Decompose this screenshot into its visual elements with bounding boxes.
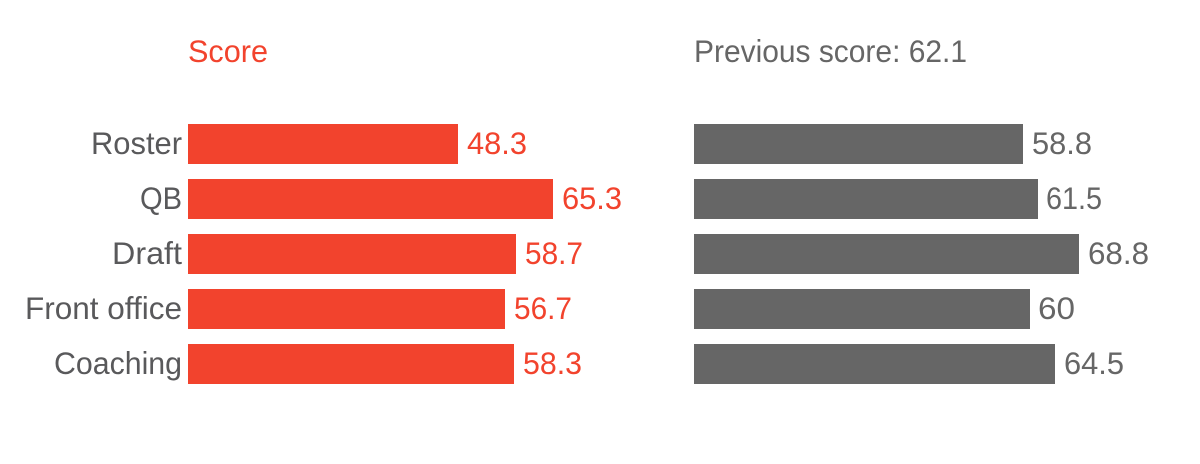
score values: 65.3 bbox=[562, 180, 622, 216]
previous score values: 68.8 bbox=[1088, 235, 1149, 271]
row labels: Roster bbox=[91, 125, 182, 161]
score values: 58.3 bbox=[523, 345, 582, 381]
previous score values: 58.8 bbox=[1032, 125, 1092, 161]
row labels: Front office bbox=[25, 290, 182, 326]
previous score values bbox=[1032, 125, 1149, 381]
row labels: Coaching bbox=[54, 345, 182, 381]
score values: 56.7 bbox=[514, 290, 572, 326]
grey previous score bars bbox=[694, 124, 1079, 384]
score values: 58.7 bbox=[525, 235, 583, 271]
row labels: QB bbox=[140, 180, 182, 216]
heading: Score: Score bbox=[188, 33, 268, 69]
heading: Previous score: Previous score: 62.1 bbox=[694, 33, 967, 69]
previous score values: 61.5 bbox=[1046, 180, 1102, 216]
score values: 48.3 bbox=[467, 125, 527, 161]
score values bbox=[467, 125, 622, 381]
previous score values: 60 bbox=[1038, 290, 1075, 326]
previous score values: 64.5 bbox=[1064, 345, 1124, 381]
red score bars bbox=[188, 124, 553, 384]
row labels bbox=[25, 125, 182, 381]
row labels: Draft bbox=[112, 235, 182, 271]
